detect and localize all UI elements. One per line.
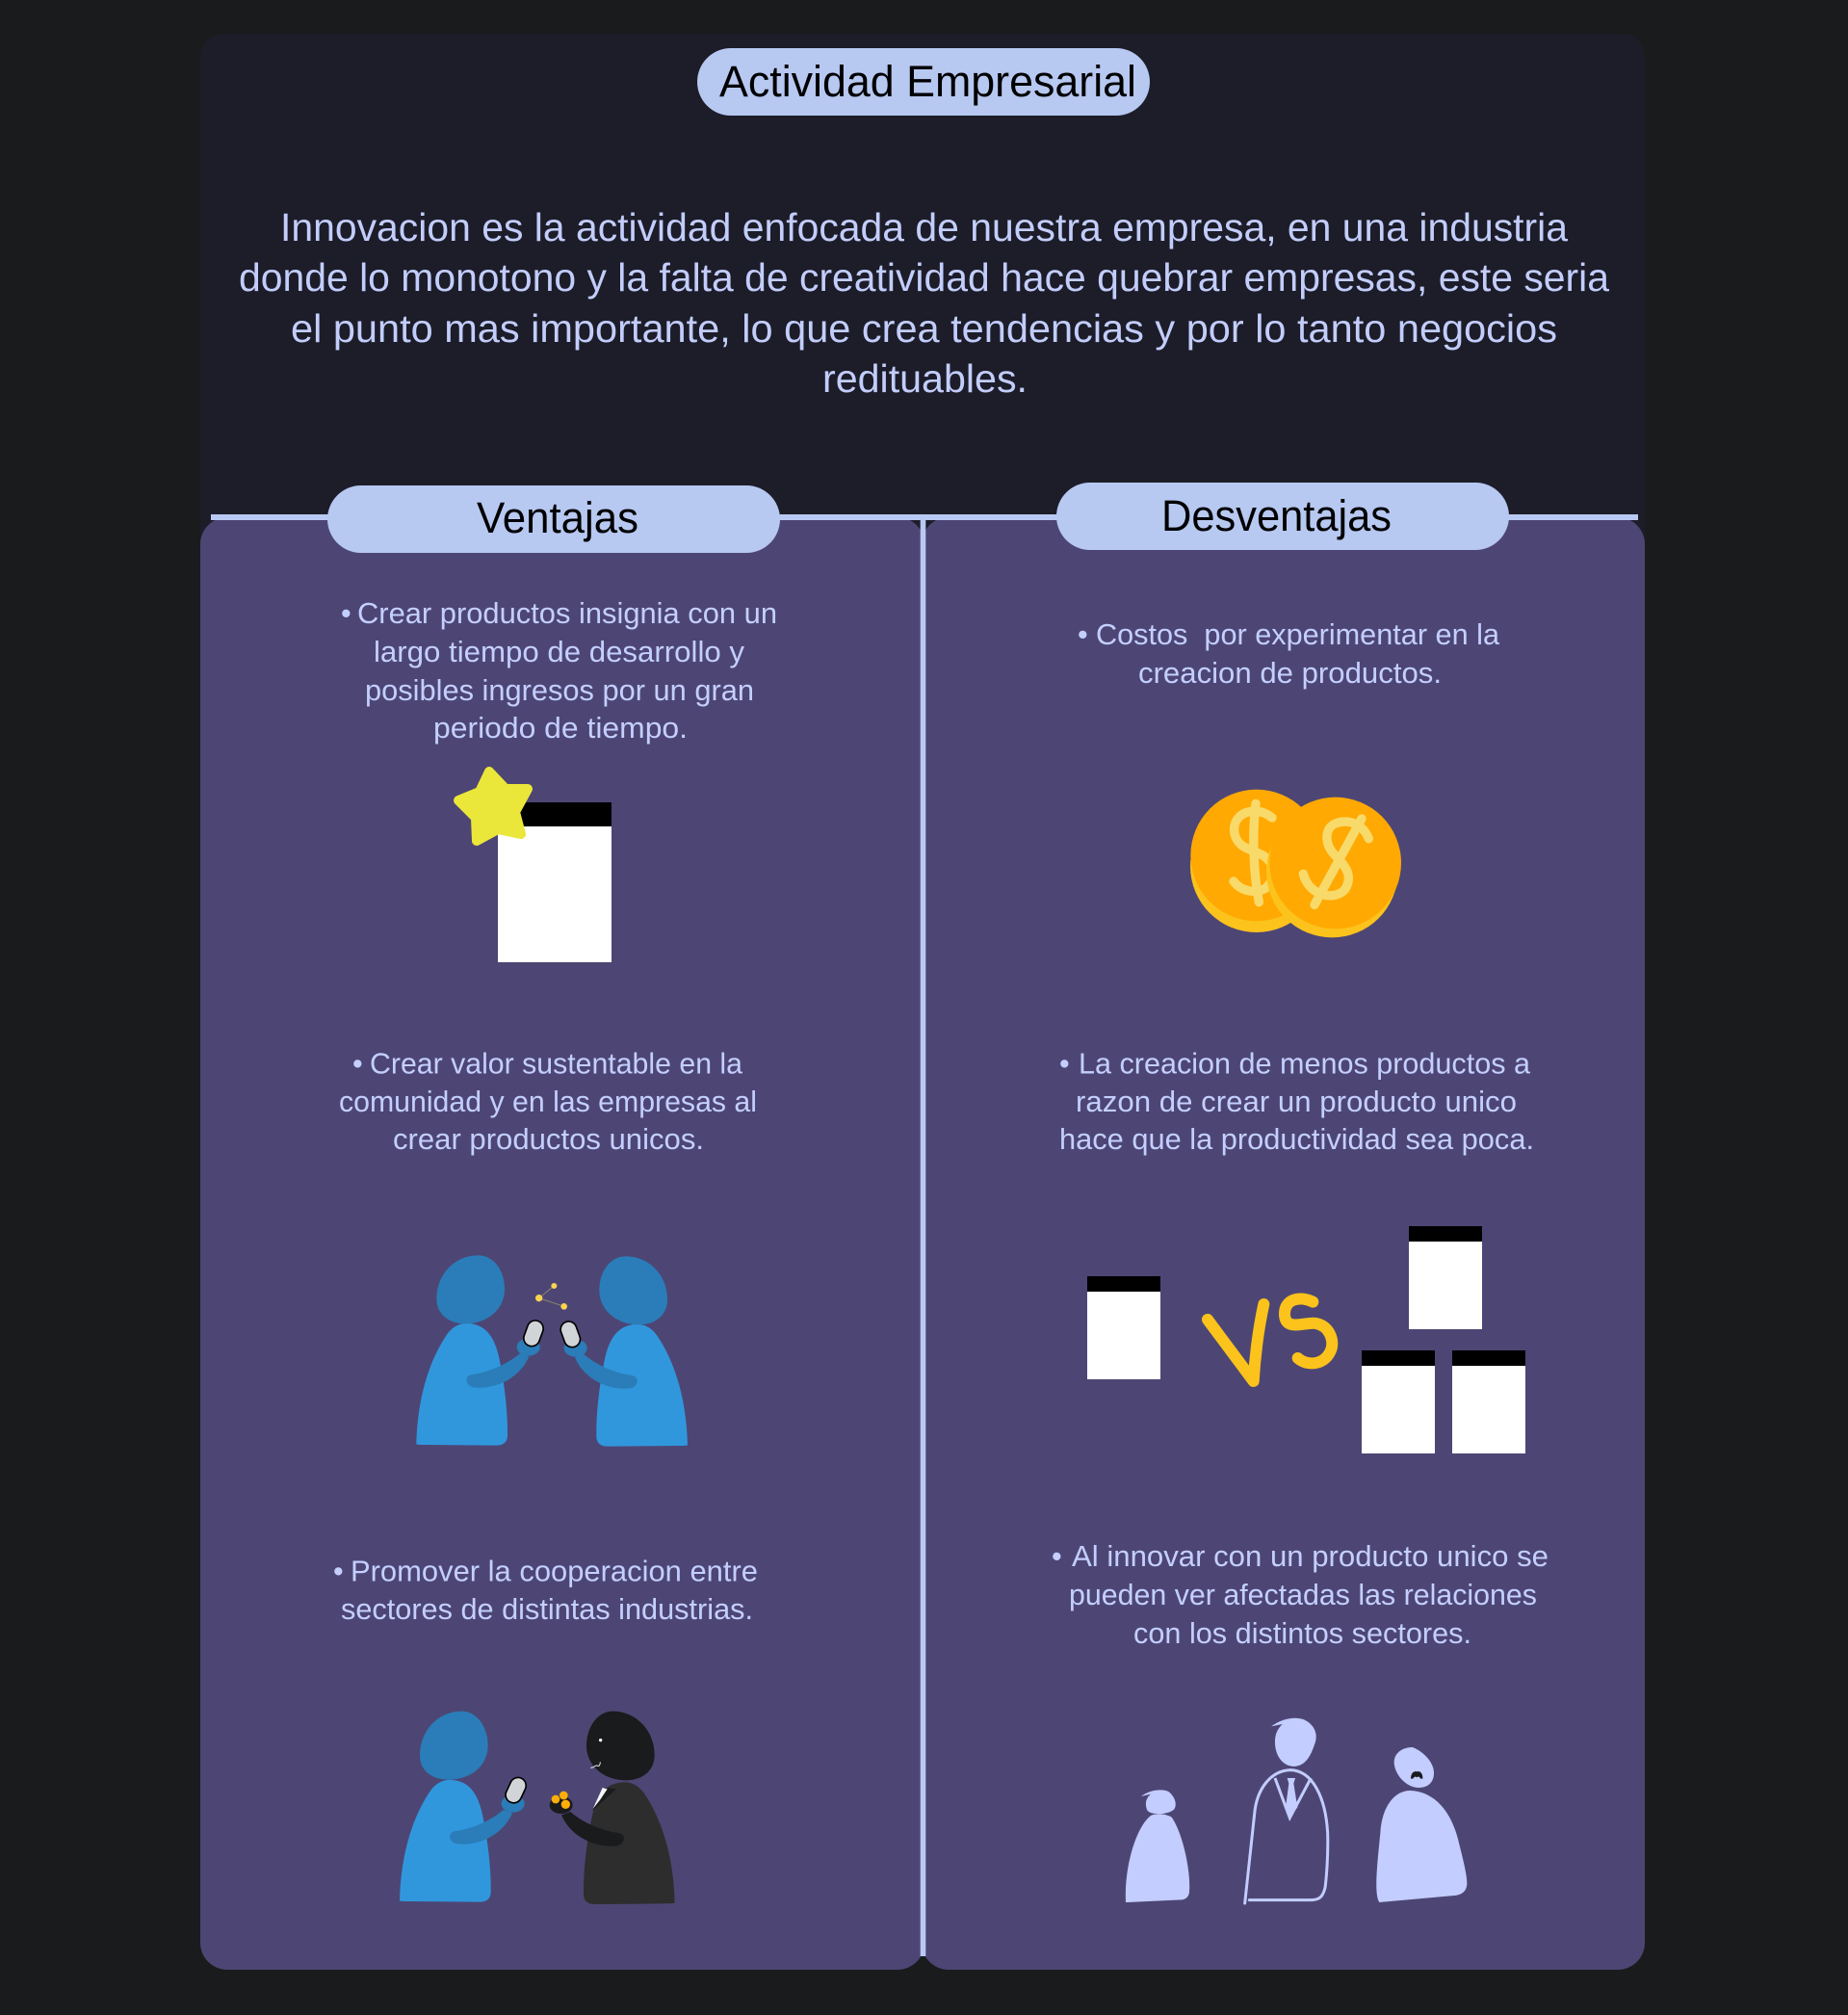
person left xyxy=(416,1255,546,1446)
figure small xyxy=(1126,1790,1189,1902)
heading: desventajas: Desventajas xyxy=(1161,491,1392,540)
intro text: Innovacion es la actividad enfocada de nuestra empresa, en una industria xyxy=(280,205,1568,249)
icon: one product vs three products xyxy=(1087,1226,1525,1453)
figure mustache xyxy=(1376,1747,1467,1902)
text: desventaja 3: con los distintos sectores. xyxy=(1133,1617,1471,1650)
text: desventaja 2: • xyxy=(1059,1048,1070,1081)
coin right xyxy=(1266,798,1401,937)
text: ventaja 1: posibles ingresos por un gran xyxy=(365,674,754,707)
panel: desventajas xyxy=(922,517,1645,1970)
intro text: el punto mas importante, lo que crea tendencias y por lo tanto negocios xyxy=(291,306,1557,351)
text: desventaja 3 xyxy=(1052,1540,1549,1650)
text: ventaja 2 xyxy=(339,1048,757,1156)
person right xyxy=(559,1256,688,1447)
heading: ventajas xyxy=(327,485,780,553)
text: desventaja 3: Al innovar con un producto unico se xyxy=(1072,1540,1549,1573)
text: ventaja 3: Promover la cooperacion entre xyxy=(351,1555,758,1587)
intro text: redituables. xyxy=(822,356,1028,401)
text: ventaja 2: Crear valor sustentable en la xyxy=(370,1048,742,1081)
text: ventaja 2: • xyxy=(352,1048,363,1081)
intro text xyxy=(239,205,1609,401)
text: ventaja 2: comunidad y en las empresas al xyxy=(339,1086,757,1118)
single product xyxy=(1087,1276,1160,1379)
icon: person and businessman xyxy=(400,1712,675,1904)
text: ventaja 2: crear productos unicos. xyxy=(393,1123,704,1156)
text: ventaja 1: Crear productos insignia con un xyxy=(357,597,777,630)
text: desventaja 2: La creacion de menos productos a xyxy=(1079,1048,1530,1081)
businessman xyxy=(550,1712,675,1904)
title pill: Actividad Empresarial xyxy=(719,57,1136,106)
text: ventaja 1: largo tiempo de desarrollo y xyxy=(374,636,745,668)
heading: desventajas xyxy=(1056,483,1509,550)
text: desventaja 3: pueden ver afectadas las relaciones xyxy=(1069,1579,1537,1611)
three products xyxy=(1362,1226,1525,1453)
vs xyxy=(1208,1298,1332,1381)
icon: coins xyxy=(1190,790,1401,937)
text: ventaja 1 xyxy=(341,597,777,745)
title pill xyxy=(697,48,1150,116)
text: desventaja 2 xyxy=(1059,1048,1534,1156)
idea nodes xyxy=(535,1283,567,1310)
text: ventaja 3: • xyxy=(333,1555,344,1587)
text: ventaja 1: periodo de tiempo. xyxy=(433,712,688,745)
person blue xyxy=(400,1712,529,1902)
icon: product with star xyxy=(458,772,612,962)
text: desventaja 3: • xyxy=(1052,1540,1062,1573)
panel: ventajas xyxy=(200,517,924,1970)
text: desventaja 2: razon de crear un producto unico xyxy=(1076,1086,1517,1118)
text: ventaja 3 xyxy=(333,1555,758,1626)
icon: sector figures xyxy=(1126,1718,1467,1903)
text: desventaja 1: Costos por experimentar en la xyxy=(1096,618,1499,651)
text: ventaja 3: sectores de distintas industrias. xyxy=(341,1593,753,1626)
text: ventaja 1: • xyxy=(341,597,351,630)
text: desventaja 1: creacion de productos. xyxy=(1138,657,1442,690)
text: desventaja 2: hace que la productividad sea poca. xyxy=(1059,1123,1534,1156)
icon: two people with phones xyxy=(416,1255,688,1447)
heading: ventajas: Ventajas xyxy=(477,493,638,542)
text: desventaja 1 xyxy=(1078,618,1499,690)
text: desventaja 1: • xyxy=(1078,618,1088,651)
figure suit xyxy=(1245,1718,1328,1903)
divider lines xyxy=(211,514,1638,1956)
intro text: donde lo monotono y la falta de creatividad hace quebrar empresas, este seria xyxy=(239,255,1609,300)
panel: header xyxy=(200,34,1645,573)
coin left xyxy=(1190,790,1322,932)
